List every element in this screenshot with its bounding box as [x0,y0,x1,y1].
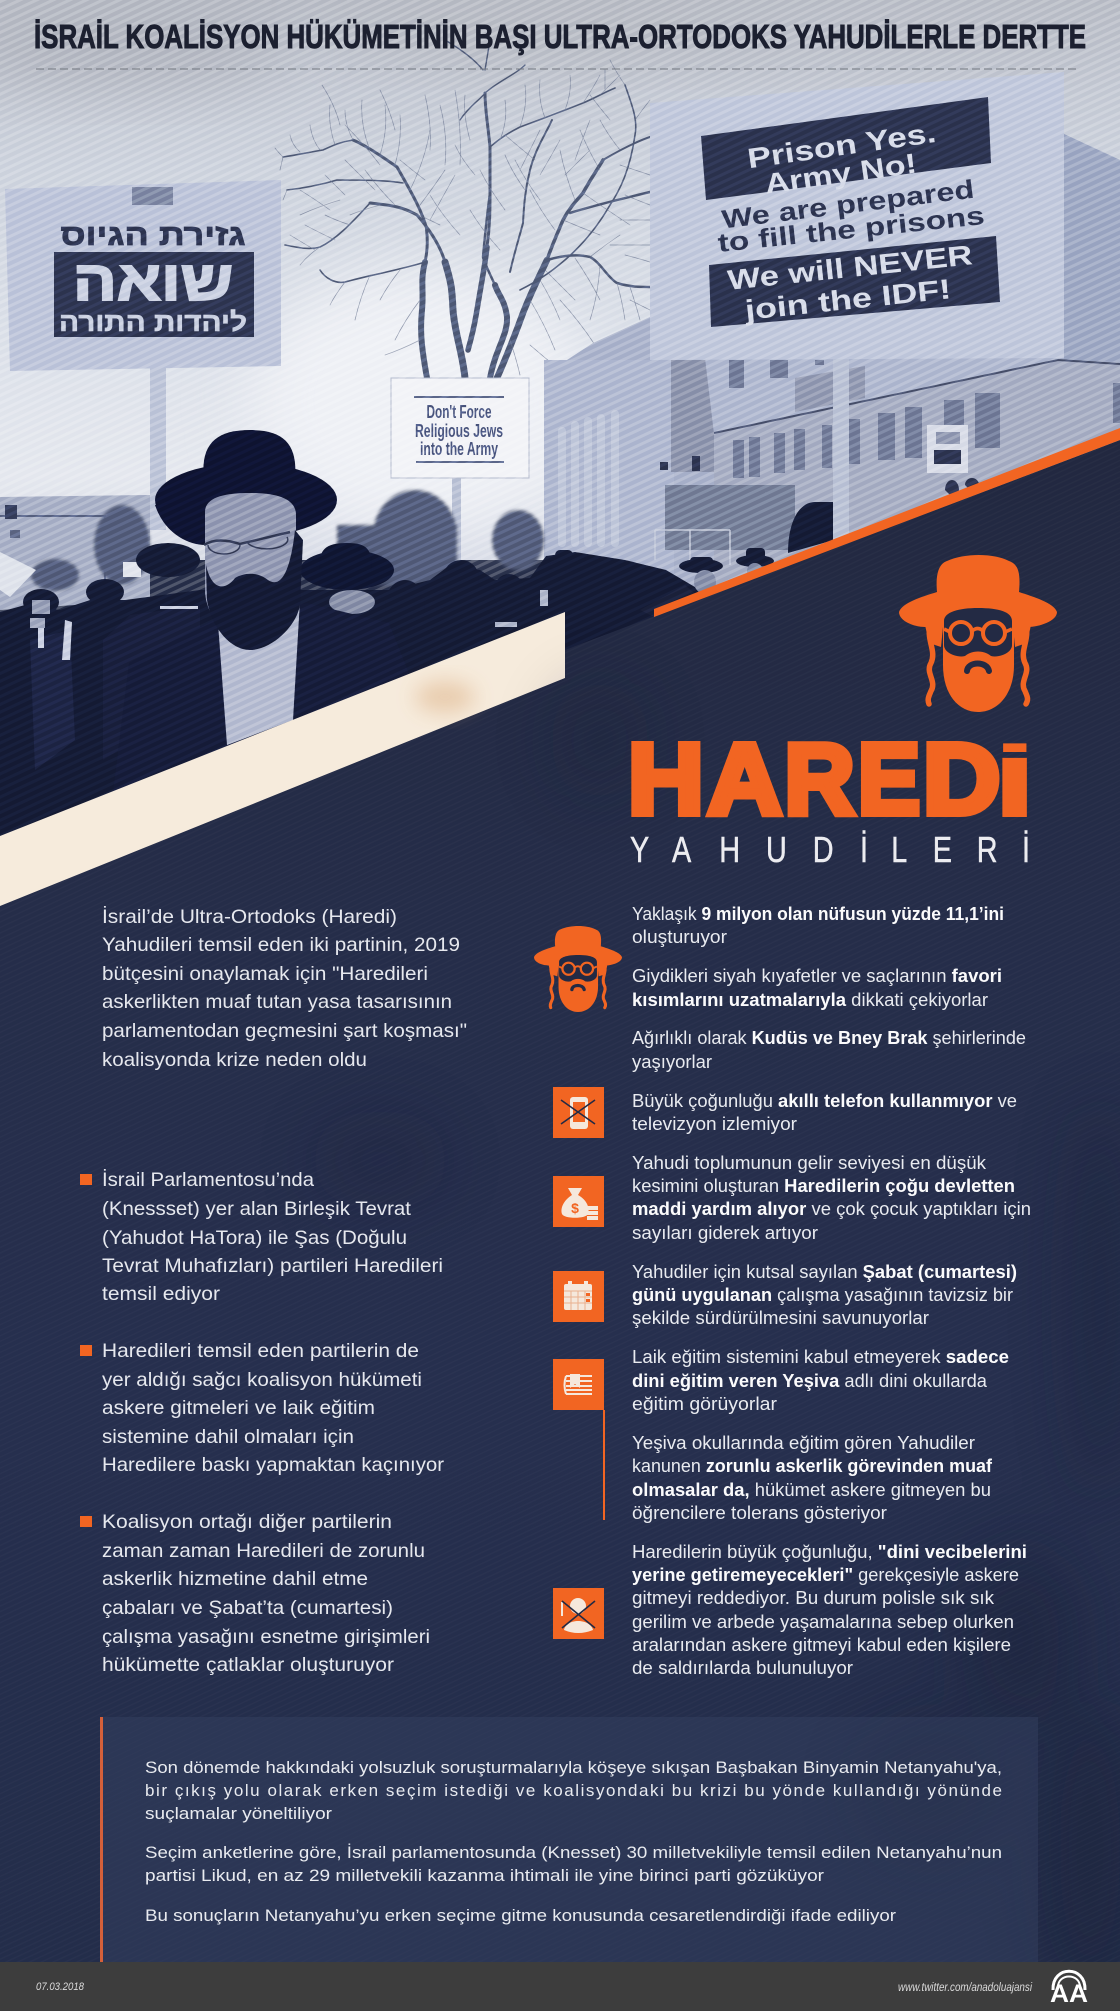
facts column: yerine getiremeyecekleri" gerekçesiyle askere [632,1565,1019,1585]
bullet block: government: Haredilere baskı yapmaktan kaçınıyor [102,1454,445,1476]
facts column: Haredilerin büyük çoğunluğu, "dini vecibelerini [632,1542,1027,1562]
facts column: şekilde sürdürülmesini savunuyorlar [632,1308,929,1328]
facts column: kısımlarını uzatmalarıyla dikkati çekiyorlar [632,990,988,1010]
sign: center: into the Army [420,439,498,459]
facts column: aralarından askere gitmeyi kabul eden kişilere [632,1635,1011,1655]
intro text block: Yahudileri temsil eden iki partinin, 2019 [102,934,460,956]
intro text block [102,905,467,1071]
man in hat [155,430,394,745]
sign: right English: join the IDF! [742,273,953,326]
facts column: eğitim görüyorlar [632,1394,777,1414]
bullet block: coalition: çalışma yasağını esnetme girişimleri [102,1626,430,1648]
sign: right English: Army No! [763,148,919,200]
bullet block: government: sistemine dahil olmaları için [102,1426,354,1448]
panel: election summary: Son dönemde hakkındaki yolsuzluk soruşturmalarıyla köşeye sıkışan Başbakan Binyamin Netanyahu'ya, [145,1758,1002,1777]
facts column: Laik eğitim sistemini kabul etmeyerek sadece [632,1347,1009,1367]
date: 07.03.2018 [36,1981,85,1993]
icon: no smartphone [553,1087,604,1138]
facts column: gerilim ve arbede yaşamalarına sebep olurken [632,1612,1014,1632]
facts column: olmasalar da, hükümet askere gitmeyen bu [632,1480,991,1500]
bullet block: parties: (Yahudot HaTora) ile Şas (Doğulu [102,1227,407,1249]
panel: election summary: suçlamalar yöneltiliyor [145,1804,332,1823]
background town and trees [0,490,544,610]
facts column: Yeşiva okullarında eğitim gören Yahudiler [632,1433,975,1453]
facts column: öğrencilere tolerans gösteriyor [632,1503,887,1523]
heading: HAREDİ: R [784,723,855,835]
facts column: Ağırlıklı olarak Kudüs ve Bney Brak şehirlerinde [632,1028,1026,1048]
sign: center: Don't Force [426,402,492,422]
heading: HAREDİ: İ [991,739,1038,836]
cream stripe [0,612,565,906]
bullet block: coalition: hükümette çatlaklar oluşturuyor [102,1654,395,1676]
facts column: gitmeyi reddediyor. Bu durum polisle sık sık [632,1588,995,1608]
bullet block: government: askere gitmeleri ve laik eğitim [102,1397,375,1419]
heading: YAHUDİLERİ: YAHUDİLERİ [630,829,1030,870]
facts column: sayıları giderek artıyor [632,1223,818,1243]
facts column: Yaklaşık 9 milyon olan nüfusun yüzde 11,1’ini [632,904,1004,924]
facts column: maddi yardım alıyor ve çok çocuk yaptıkları için [632,1199,1031,1219]
stripes overlay on photo [0,0,1120,860]
sign: left Hebrew: ליהדות התורה [59,307,247,337]
heading: HAREDİ [631,741,1027,818]
bullet block: parties: Tevrat Muhafızları) partileri Haredileri [102,1255,443,1277]
intro text block: askerlikten muaf tutan yasa tasarısının [102,991,452,1013]
facts column: televizyon izlemiyor [632,1114,797,1134]
building [544,134,1120,600]
photo background: protest scene [0,0,1120,880]
orange stripe [654,428,1120,617]
sign: left Hebrew [5,180,281,530]
panel: election summary: bir çıkış yolu olarak erken seçim istediği ve koalisyondaki bu krizi bu yönde kullandığı yönünde [145,1781,1002,1800]
bullet block: coalition [80,1511,430,1676]
icon: money bag: $ [571,1200,579,1216]
facts column: kesimini oluşturan Haredilerin çoğu devletten [632,1176,1015,1196]
icon: small Haredi head [534,926,622,1012]
facts column: de saldırılarda bulunuluyor [632,1658,853,1678]
bullet block: parties: temsil ediyor [102,1283,221,1305]
facts column: oluşturuyor [632,927,727,947]
bullet block: coalition: Koalisyon ortağı diğer partilerin [102,1511,392,1533]
sign: center: Religious Jews [415,421,503,441]
bullet block: parties: İsrail Parlamentosu’nda [102,1168,314,1191]
facts column: kanunen zorunlu askerlik görevinden muaf [632,1456,993,1476]
panel stains [547,670,1115,1937]
sign: right English: to fill the prisons [716,200,986,258]
intro text block: koalisyonda krize neden oldu [102,1049,367,1071]
sign: center [391,378,529,565]
icon: money bag [553,1176,604,1227]
facts column: günü uygulanan çalışma yasağının tavizsiz bir [632,1285,1013,1305]
bare tree [275,40,650,378]
bullet block: government: yer aldığı sağcı koalisyon hükümeti [102,1369,422,1391]
icon: AA logo: AA [1050,1980,1088,2008]
intro text block: İsrail’de Ultra-Ortodoks (Haredi) [102,905,397,928]
facts column [632,904,1031,1678]
bullet block: government [80,1340,445,1476]
icon: large Haredi head [899,555,1057,712]
heading: HAREDİ: D [923,723,1000,835]
heading: HAREDİ: H [628,723,704,835]
bullet block: parties: (Knessset) yer alan Birleşik Tevrat [102,1198,412,1220]
facts column: Yahudiler için kutsal sayılan Şabat (cumartesi) [632,1262,1017,1282]
icon: no soldier [553,1588,604,1639]
sign: right English: We will NEVER [726,239,974,296]
facts column: dini eğitim veren Yeşiva adlı dini okullarda [632,1371,988,1391]
dark panel [112,440,1120,880]
panel: election summary: Bu sonuçların Netanyahu’yu erken seçime gitme konusunda cesaretlendirdiği ifade ediliyor [145,1906,896,1925]
bullet block: parties [80,1168,443,1305]
bullet block: coalition: askerlik hizmetine dahil etme [102,1568,368,1590]
bullet block: coalition: çabaları ve Şabat’ta (cumartesi) [102,1597,393,1619]
facts column: yaşıyorlar [632,1052,712,1072]
crowd [0,543,774,860]
icon: calendar [553,1271,604,1322]
facts column: Büyük çoğunluğu akıllı telefon kullanmıyor ve [632,1091,1017,1111]
panel: election summary: partisi Likud, en az 29 milletvekili kazanma ihtimali ile yine birinci parti gözüküyor [145,1866,824,1885]
sign: left Hebrew: שואה [73,249,233,312]
panel: election summary: Seçim anketlerine göre, İsrail parlamentosunda (Knesset) 30 milletvekiliyle temsil edilen Netanyahu’nun [145,1843,1002,1862]
bullet block: coalition: zaman zaman Haredileri de zorunlu [102,1540,425,1562]
heading: HAREDİ: E [858,724,920,835]
source url: www.twitter.com/anadoluajansi [898,1982,1032,1994]
sign: right English [650,72,1064,545]
bullet block: government: Haredileri temsil eden partilerin de [102,1340,419,1362]
footer bar [0,1962,1120,2011]
sign: right English: Prison Yes. [745,117,938,174]
intro text block: bütçesini onaylamak için "Haredileri [102,963,428,985]
diagonal texture on panel [534,561,1030,1214]
sign: right English: We are prepared [720,174,976,234]
heading: HAREDİ: A [708,723,782,835]
sign: left Hebrew: גזירת הגיוס [60,219,246,252]
facts column: Giydikleri siyah kıyafetler ve saçlarının favori [632,966,1002,986]
icon: books with connector line [553,1359,605,1520]
facts column: Yahudi toplumunun gelir seviyesi en düşük [632,1153,987,1173]
panel: election summary [100,1717,1038,1962]
intro text block: parlamentodan geçmesini şart koşması" [102,1020,467,1042]
